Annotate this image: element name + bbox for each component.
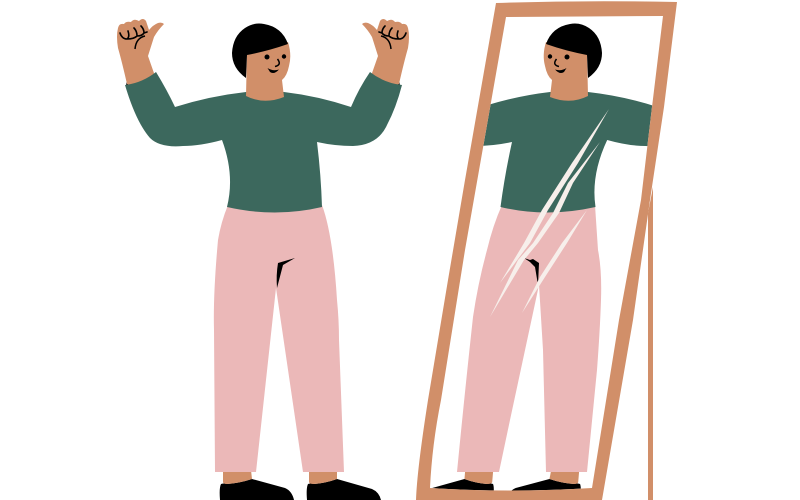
trousers [214, 205, 344, 472]
reflected shoes and ankles [432, 472, 581, 490]
reflected trousers [457, 205, 601, 472]
left hand [117, 19, 164, 90]
right hand [362, 19, 409, 90]
right shoe [307, 479, 381, 500]
eyes [264, 54, 270, 60]
reflected sweater [483, 92, 652, 212]
hair [232, 24, 288, 78]
neck and face [246, 42, 290, 101]
nose [275, 59, 279, 66]
mirror stand leg [648, 187, 653, 500]
sweater [125, 72, 402, 212]
head [232, 24, 290, 101]
right ankle [309, 470, 337, 484]
reflected head [544, 24, 602, 101]
trouser crease [277, 258, 295, 288]
left shoe [220, 479, 294, 500]
left ankle [223, 470, 252, 484]
smile [268, 68, 279, 73]
figure: person [117, 19, 409, 500]
mirror reflection [432, 24, 652, 490]
glass scratches [490, 109, 609, 317]
mirror frame [416, 1, 677, 500]
reflected trouser crease [525, 258, 539, 282]
illustration: person and mirror [117, 1, 677, 500]
